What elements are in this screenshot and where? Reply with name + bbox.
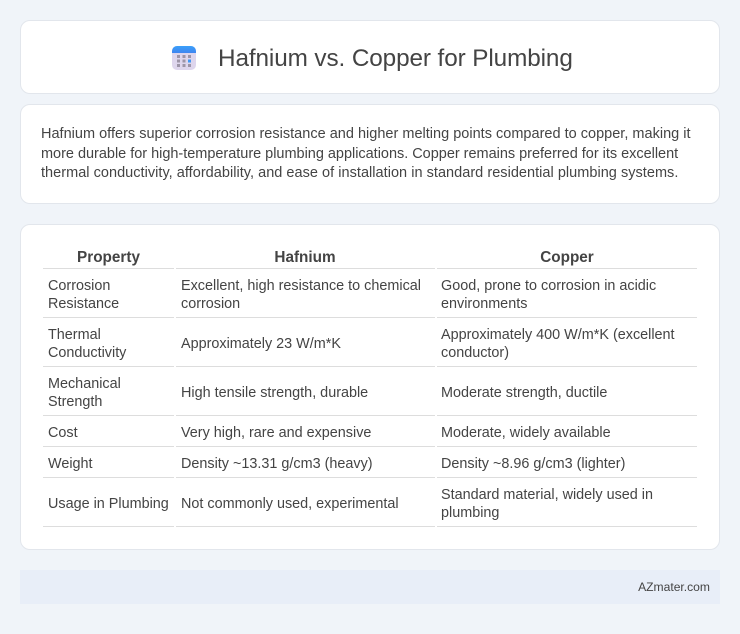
row: mechanical strength: Mechanical — [48, 376, 121, 392]
table content: Approximately 400 W/m*K (excellent — [441, 327, 675, 343]
header: hafnium: Hafnium — [274, 249, 336, 266]
panel: comparison table — [20, 224, 720, 550]
row: corrosion resistance: Resistance — [48, 296, 119, 312]
table content: High tensile strength, durable — [181, 385, 368, 401]
footer bar — [20, 570, 720, 604]
table content — [43, 249, 697, 527]
footer text: AZmater.com — [638, 580, 710, 594]
row: corrosion resistance: Corrosion — [48, 278, 110, 294]
table content: Density ~13.31 g/cm3 (heavy) — [181, 456, 373, 472]
header: copper: Copper — [540, 249, 594, 266]
title: Hafnium vs. Copper for Plumbing — [218, 45, 573, 72]
table content: Very high, rare and expensive — [181, 425, 371, 441]
table content: conductor) — [441, 345, 509, 361]
table content: Excellent, high resistance to chemical — [181, 278, 421, 294]
icon: calendar — [172, 46, 196, 70]
row: mechanical strength: Strength — [48, 394, 102, 410]
table content: environments — [441, 296, 527, 312]
table content: Moderate strength, ductile — [441, 385, 607, 401]
table content: Approximately 23 W/m*K — [181, 336, 341, 352]
summary text: thermal conductivity, affordability, and ease of installation in standard residential plumbing systems. — [41, 165, 678, 181]
row: usage in plumbing: Usage in Plumbing — [48, 496, 169, 512]
row: thermal conductivity: Conductivity — [48, 345, 126, 361]
row: mechanical strength — [48, 376, 121, 410]
summary text: more durable for high-temperature plumbing applications. Copper remains preferred for its excellent — [41, 146, 678, 162]
summary text: Hafnium offers superior corrosion resistance and higher melting points compared to copper, making it — [41, 126, 691, 142]
header: property: Property — [77, 249, 140, 266]
table content: Standard material, widely used in — [441, 487, 653, 503]
table content: corrosion — [181, 296, 240, 312]
row: cost: Cost — [48, 425, 78, 441]
row: thermal conductivity — [48, 327, 126, 361]
row: weight: Weight — [48, 456, 93, 472]
table content: Moderate, widely available — [441, 425, 611, 441]
table content: plumbing — [441, 505, 499, 521]
panel: title card — [20, 20, 720, 94]
table content: Not commonly used, experimental — [181, 496, 399, 512]
panel: summary card — [20, 104, 720, 204]
summary text — [41, 126, 691, 181]
row: corrosion resistance — [48, 278, 119, 312]
table content: Density ~8.96 g/cm3 (lighter) — [441, 456, 625, 472]
row: thermal conductivity: Thermal — [48, 327, 101, 343]
table content: Good, prone to corrosion in acidic — [441, 278, 656, 294]
